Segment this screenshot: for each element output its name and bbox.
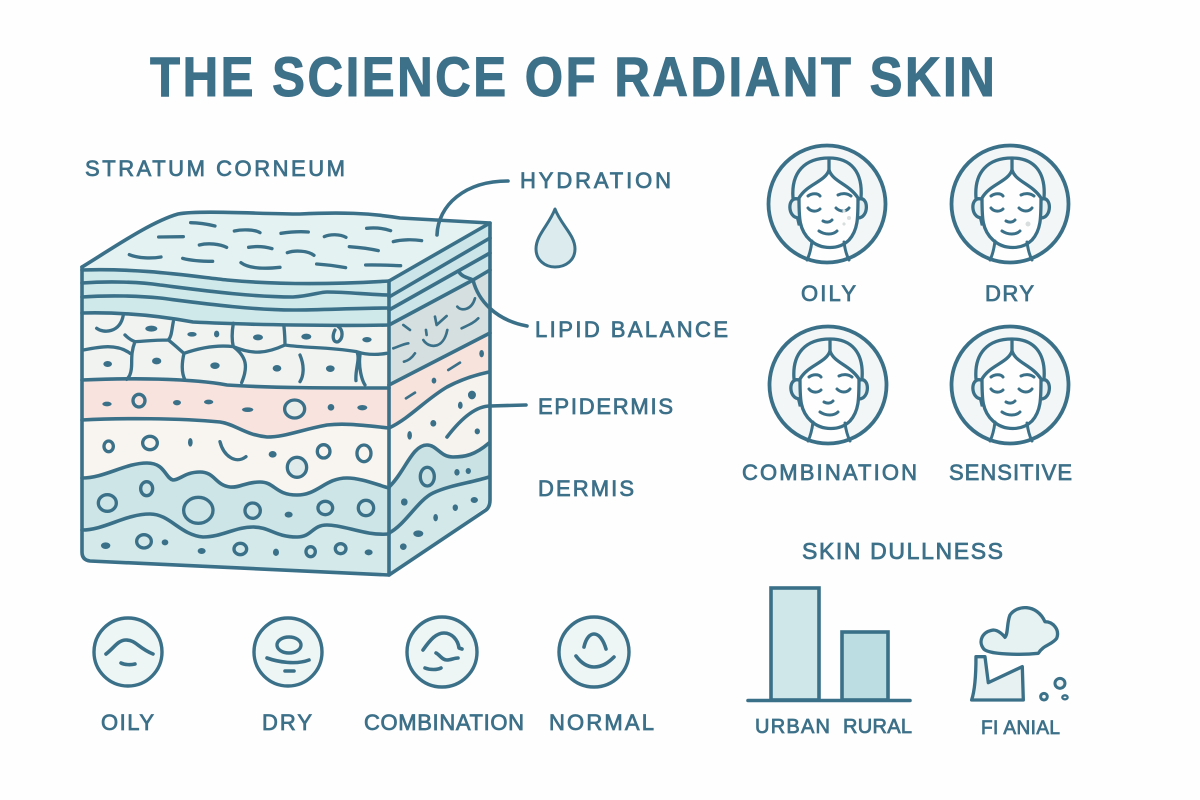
icon: dry texture <box>254 618 322 686</box>
label: hydration: HYDRATION <box>520 168 671 193</box>
label: combination texture: COMBINATION <box>364 710 524 735</box>
blue upper layers <box>82 270 389 325</box>
title: THE SCIENCE OF RADIANT SKIN <box>150 46 995 109</box>
label: epidermis: EPIDERMIS <box>538 394 673 419</box>
label: dermis: DERMIS <box>538 476 634 501</box>
icon: normal texture <box>559 617 629 687</box>
panel: skin dullness <box>748 538 1068 739</box>
icon: dry face <box>952 146 1068 263</box>
icon: sensitive face <box>952 326 1068 444</box>
pink layer <box>82 379 389 437</box>
label: urban: URBAN <box>755 716 830 738</box>
label: lipid balance: LIPID BALANCE <box>535 317 728 342</box>
panel: skin texture icons <box>94 617 654 735</box>
icon: oily face <box>768 146 886 263</box>
lower dermis layer <box>82 514 389 575</box>
panel: skin cross-section block <box>82 212 490 575</box>
label: dry texture: DRY <box>262 710 312 735</box>
cell layer <box>82 313 389 388</box>
right face fills <box>389 223 490 325</box>
label: combination: COMBINATION <box>742 460 917 485</box>
cream layer <box>82 419 389 495</box>
panel: face types <box>742 146 1072 485</box>
label: oily texture: OILY <box>101 710 154 735</box>
label: oily: OILY <box>801 281 856 306</box>
bar: urban <box>771 588 819 700</box>
pores and circles <box>98 391 480 557</box>
icon: factory with smog <box>972 608 1068 700</box>
label: normal texture: NORMAL <box>549 710 654 735</box>
layer contour lines <box>82 212 490 575</box>
arrow: hydration leader <box>437 181 508 235</box>
right-face squiggles <box>393 298 484 384</box>
surface flakes <box>129 223 422 268</box>
blue dermis layer <box>82 463 389 537</box>
icon: oily texture <box>94 618 162 686</box>
label: stratum corneum: STRATUM CORNEUM <box>85 156 345 181</box>
label: dry: DRY <box>985 281 1034 306</box>
icon: combination face <box>770 326 886 444</box>
arrow: epidermis leader <box>447 405 526 437</box>
bar: rural <box>842 632 888 700</box>
label: rural: RURAL <box>843 716 912 738</box>
heading: skin dullness: SKIN DULLNESS <box>802 538 1003 564</box>
label: fi anial: FI ANIAL <box>981 718 1060 739</box>
label: sensitive: SENSITIVE <box>949 460 1072 485</box>
cell walls <box>83 315 387 385</box>
top face of skin block <box>82 212 490 284</box>
icon: combination texture <box>407 617 477 687</box>
bar chart: urban vs rural <box>748 588 910 700</box>
icon: water drop <box>536 209 575 267</box>
arrow: lipid balance leader <box>459 272 527 326</box>
